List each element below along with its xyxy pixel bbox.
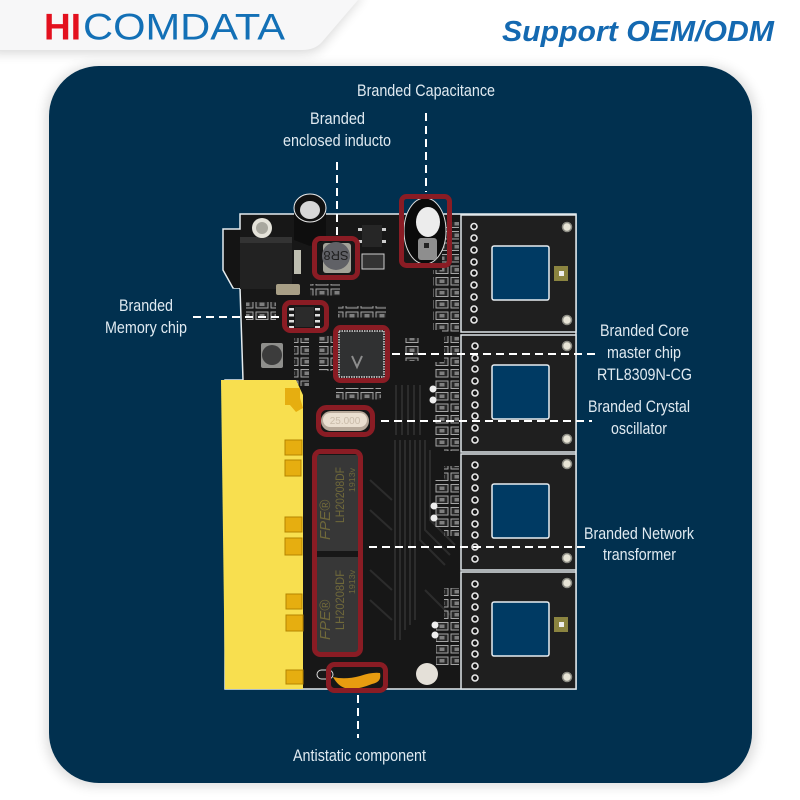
board body — [223, 214, 576, 689]
callout: Branded Core master chip RTL8309N-CG: RTL8309N-CG — [597, 365, 692, 384]
crystal oscillator: 25.000 — [330, 416, 361, 427]
antistatic component — [317, 670, 380, 689]
header background tab — [0, 0, 364, 53]
callout: Branded enclosed inducto: Branded — [310, 109, 365, 128]
network transformers: FPE® — [317, 599, 334, 640]
small capacitor — [294, 194, 326, 246]
heading: Support OEM/ODM: Support OEM/ODM — [502, 16, 775, 48]
inductor: SR8 — [323, 248, 349, 263]
yellow RJ45 connector block — [221, 380, 303, 689]
callout: Branded Capacitance: Branded Capacitance — [357, 81, 495, 100]
callout: Branded Capacitance — [357, 81, 495, 192]
callout: Branded Network transformer: Branded Network — [584, 524, 694, 543]
inductor — [322, 242, 351, 273]
copper traces — [370, 385, 455, 640]
callout: Branded Crystal oscillator — [381, 397, 690, 438]
callout: Branded Crystal oscillator: Branded Crystal — [588, 397, 690, 416]
network transformers — [317, 455, 358, 652]
callout: Branded Network transformer — [369, 524, 694, 564]
callout: Branded enclosed inducto: enclosed inducto — [283, 131, 391, 150]
SMD rows — [246, 222, 459, 668]
callout: Branded Memory chip: Memory chip — [105, 318, 187, 337]
small inductor — [261, 343, 283, 368]
crystal oscillator — [321, 411, 369, 431]
memory chip — [289, 307, 320, 328]
circuit board — [221, 194, 576, 689]
large capacitor — [404, 198, 446, 264]
callout: Branded Memory chip: Branded — [119, 296, 173, 315]
logo: HICOMDATA: COMDATA — [83, 6, 285, 48]
small circular parts — [416, 386, 438, 685]
callout: Branded Core master chip RTL8309N-CG: Branded Core — [600, 321, 689, 340]
panel: dark blue card — [46, 66, 756, 786]
network modules — [461, 215, 576, 689]
callout: Antistatic component — [293, 695, 426, 765]
callout: Antistatic component: Antistatic component — [293, 746, 426, 765]
top IC — [358, 225, 386, 269]
logo: HICOMDATA: HI — [44, 6, 81, 48]
network transformers: 1913v — [347, 569, 357, 594]
core master chip — [339, 331, 384, 377]
network transformers: LH20208DF — [333, 570, 347, 630]
callout: Branded Core master chip RTL8309N-CG: master chip — [607, 343, 681, 362]
callout: Branded Crystal oscillator: oscillator — [611, 419, 667, 438]
network transformers: FPE® — [317, 499, 334, 540]
callout highlight boxes — [284, 196, 450, 690]
callout: Branded enclosed inducto — [283, 109, 391, 236]
network transformers: LH20208DF — [333, 467, 347, 523]
callout: Branded Network transformer: transformer — [603, 545, 676, 564]
callout: Branded Core master chip RTL8309N-CG — [392, 321, 692, 384]
callout: Branded Memory chip — [105, 296, 282, 337]
network transformers: 1913v — [347, 467, 357, 492]
DC power jack — [224, 218, 301, 295]
